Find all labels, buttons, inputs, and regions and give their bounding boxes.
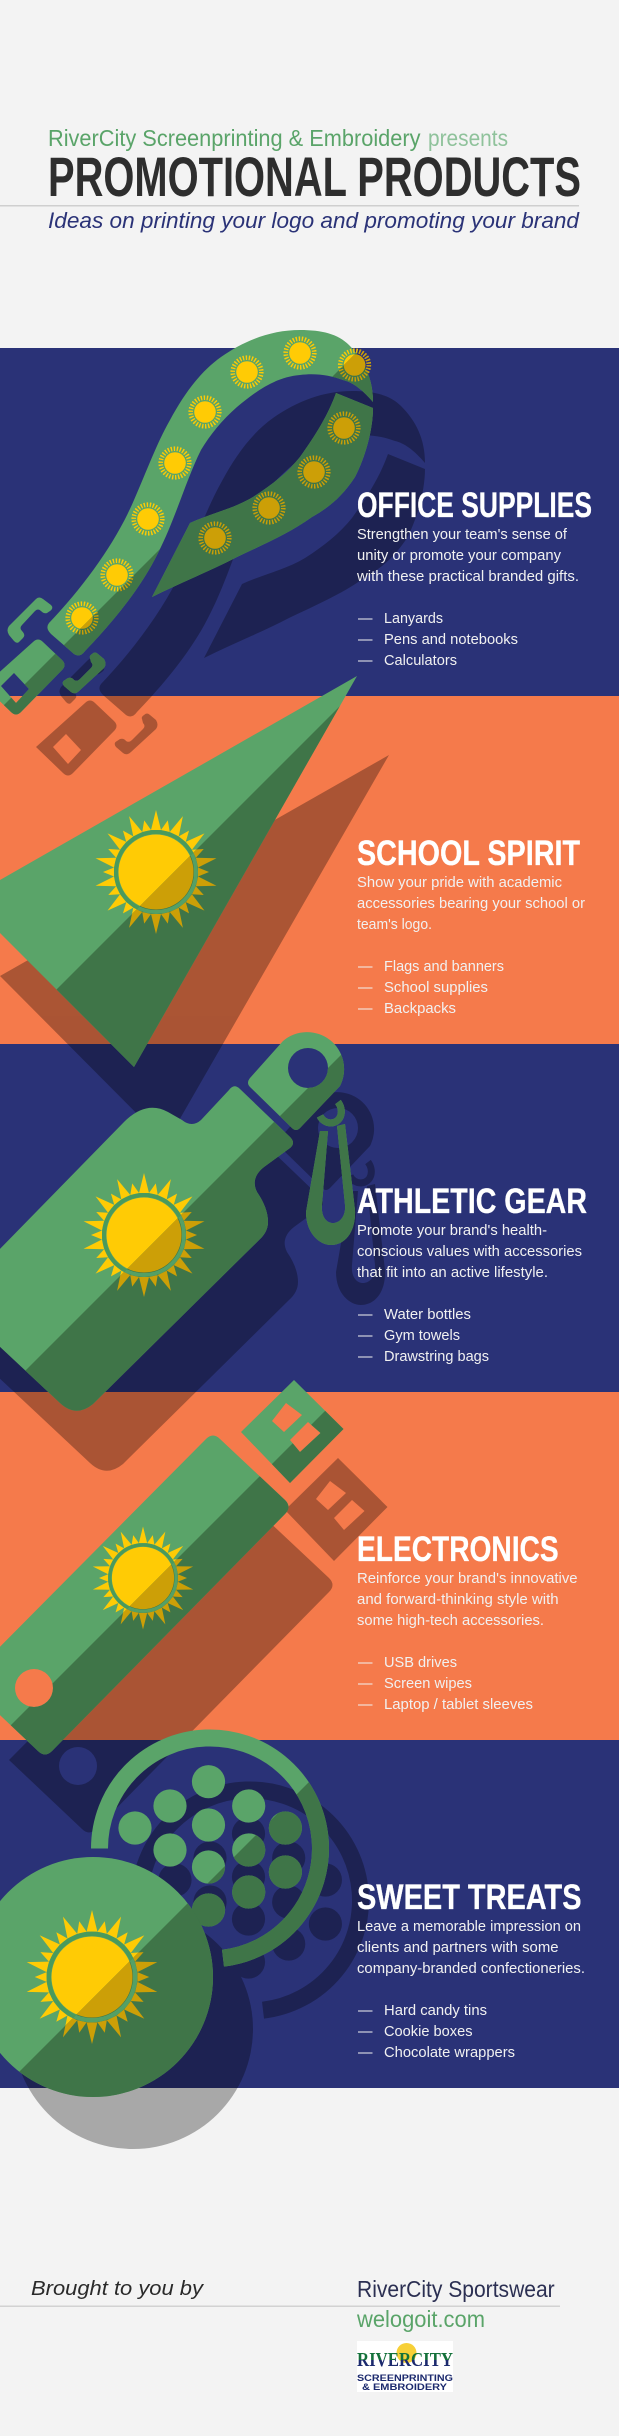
description bbox=[357, 1919, 585, 1977]
icon: pennant flag bbox=[0, 676, 357, 1067]
list: — bbox=[358, 653, 373, 669]
list: — bbox=[358, 611, 373, 627]
description: Promote your brand's health- bbox=[357, 1223, 547, 1239]
credit text: Brought to you by bbox=[31, 2278, 204, 2300]
presenter line: RiverCity Screenprinting & Embroidery bbox=[48, 125, 421, 151]
list bbox=[358, 1307, 489, 1365]
list bbox=[358, 1655, 533, 1713]
text: sweet treats bbox=[357, 1878, 585, 2061]
description: Show your pride with academic bbox=[357, 875, 562, 891]
icon: usb drive bbox=[0, 1380, 344, 1754]
description bbox=[357, 875, 585, 933]
description: that fit into an active lifestyle. bbox=[357, 1265, 548, 1281]
list: — bbox=[358, 1307, 373, 1323]
list: School supplies bbox=[384, 980, 488, 996]
list: Pens and notebooks bbox=[384, 632, 518, 648]
text: school spirit bbox=[357, 834, 585, 1017]
list: — bbox=[358, 1697, 373, 1713]
band: school spirit bbox=[0, 696, 619, 1044]
icon: candy tin bbox=[0, 1738, 321, 2097]
logo: SCREENPRINTING bbox=[357, 2373, 453, 2384]
description: conscious values with accessories bbox=[357, 1244, 582, 1260]
list: — bbox=[358, 959, 373, 975]
list: — bbox=[358, 1328, 373, 1344]
list bbox=[358, 2003, 515, 2061]
icon: lanyard bbox=[0, 330, 373, 714]
band: office supplies bbox=[0, 348, 619, 696]
list: — bbox=[358, 1655, 373, 1671]
text: office supplies bbox=[356, 486, 592, 669]
heading: ELECTRONICS bbox=[357, 1530, 559, 1569]
band: athletic gear bbox=[0, 1044, 619, 1392]
list: — bbox=[358, 2045, 373, 2061]
list bbox=[358, 611, 518, 669]
list: Lanyards bbox=[384, 611, 443, 627]
list: Drawstring bags bbox=[384, 1349, 489, 1365]
icon: water bottle bbox=[0, 1032, 355, 1411]
list: — bbox=[358, 980, 373, 996]
description: Reinforce your brand's innovative bbox=[357, 1571, 578, 1587]
band: electronics bbox=[0, 1392, 619, 1740]
logo bbox=[357, 2341, 453, 2392]
list: Flags and banners bbox=[384, 959, 504, 975]
list: Calculators bbox=[384, 653, 457, 669]
list: USB drives bbox=[384, 1655, 457, 1671]
description: accessories bearing your school or bbox=[357, 896, 585, 912]
description: company-branded confectioneries. bbox=[357, 1961, 585, 1977]
text: athletic gear bbox=[357, 1182, 587, 1365]
description bbox=[357, 1571, 578, 1629]
description: Leave a memorable impression on bbox=[357, 1919, 581, 1935]
list: — bbox=[358, 1001, 373, 1017]
text: electronics bbox=[357, 1530, 578, 1713]
description bbox=[356, 527, 579, 585]
list: Laptop / tablet sleeves bbox=[384, 1697, 533, 1713]
list: — bbox=[358, 2003, 373, 2019]
list: Water bottles bbox=[384, 1307, 471, 1323]
list: Gym towels bbox=[384, 1328, 460, 1344]
list: — bbox=[358, 1676, 373, 1692]
website: welogoit.com bbox=[356, 2306, 485, 2332]
list bbox=[358, 959, 504, 1017]
description: Strengthen your team's sense of bbox=[357, 527, 568, 543]
cast shadows of all products bbox=[0, 391, 425, 2149]
list: Cookie boxes bbox=[384, 2024, 472, 2040]
list: Hard candy tins bbox=[384, 2003, 487, 2019]
description: some high-tech accessories. bbox=[357, 1613, 544, 1629]
footer bbox=[0, 2276, 560, 2392]
list: Screen wipes bbox=[384, 1676, 472, 1692]
presenter line: presents bbox=[428, 125, 508, 151]
description: unity or promote your company bbox=[357, 548, 562, 564]
company name: RiverCity Sportswear bbox=[357, 2276, 555, 2302]
list: — bbox=[358, 2024, 373, 2040]
band: sweet treats bbox=[0, 1740, 619, 2088]
description: team's logo. bbox=[357, 917, 432, 933]
list: — bbox=[358, 632, 373, 648]
header bbox=[0, 125, 581, 233]
list: Backpacks bbox=[384, 1001, 456, 1017]
subtitle: Ideas on printing your logo and promoting your brand bbox=[48, 208, 580, 233]
description: with these practical branded gifts. bbox=[356, 569, 579, 585]
description bbox=[357, 1223, 582, 1281]
logo: RIVERCITY bbox=[357, 2349, 453, 2371]
description: clients and partners with some bbox=[357, 1940, 559, 1956]
description: and forward-thinking style with bbox=[357, 1592, 559, 1608]
logo: & EMBROIDERY bbox=[362, 2382, 447, 2392]
list: Chocolate wrappers bbox=[384, 2045, 515, 2061]
list: — bbox=[358, 1349, 373, 1365]
